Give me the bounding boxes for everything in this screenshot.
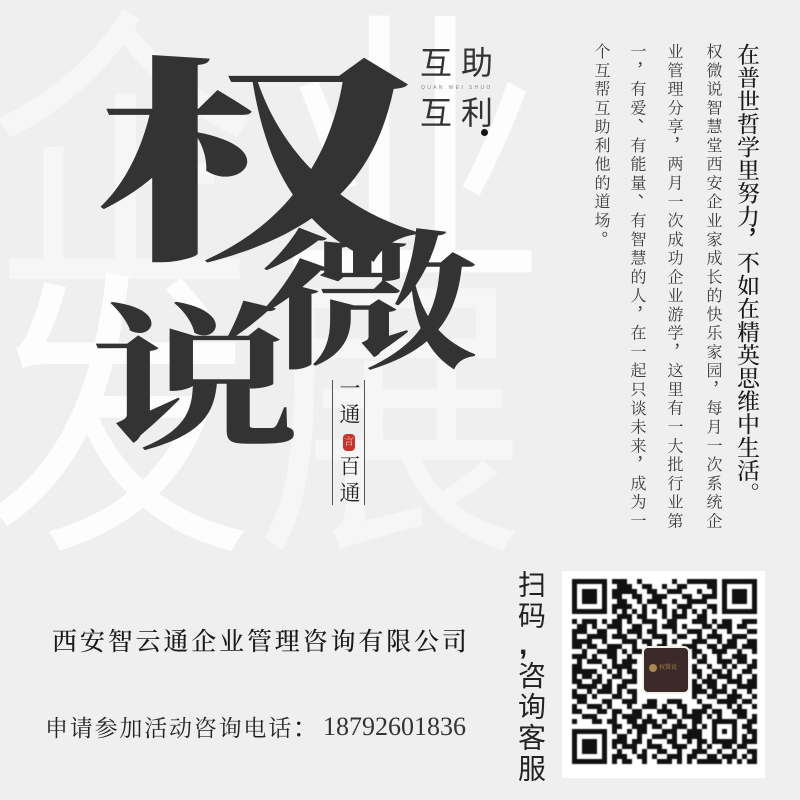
scan: 咨询客服: 咨询客服 [515, 661, 546, 785]
icon: red seal [343, 434, 355, 451]
QR code panel [562, 571, 765, 778]
slogan: 互助: 互助 [420, 45, 502, 81]
body text column 4: 个互帮互助利他的道场 。 [588, 43, 612, 249]
slogan: 互利: 互利 [420, 95, 502, 131]
phone number: 18792601836 [323, 712, 466, 741]
scan prompt [515, 570, 546, 785]
vertical motto with rules and seal [332, 380, 365, 505]
headline column: 在普世哲学里努力 ， 不如在精英思维中生活。 [730, 43, 763, 505]
icon: red seal: 言 [344, 437, 354, 448]
QR centre logo [642, 646, 690, 694]
body text column 2: 业管理分享 ， 两月一次成功企业游学 ， 这里有一大批行业第 [661, 43, 685, 531]
motto: 一通: 一通 [337, 377, 361, 429]
motto: 百通: 百通 [337, 455, 361, 508]
contact phone [45, 709, 466, 743]
scan: 扫码: 扫码 [515, 570, 546, 632]
calligraphy title: 微: 微 [258, 222, 480, 389]
calligraphy title: 权: 权 [95, 48, 420, 289]
pinyin caption: QUAN WEI SHUO [421, 85, 493, 91]
scan comma: , [519, 628, 527, 661]
logo name: 权微说 [659, 665, 677, 671]
background watermark: 展: 展 [256, 254, 526, 590]
icon: black dot [481, 129, 488, 136]
contact phone: 申请参加活动咨询电话： [45, 709, 318, 743]
body text column 1: 权微说智慧堂西安企业家成长的快乐家园 ， 每月一次系统企 [700, 43, 724, 531]
background watermark: 业: 业 [277, 0, 547, 328]
QR code [571, 578, 758, 765]
body text column 3: 一 ， 有爱 、 有能量 、 有智慧的人 ， 在一起只谈未来 ， 成为一 [624, 43, 648, 531]
logo emblem [649, 664, 657, 672]
company name: 西安智云通企业管理咨询有限公司 [52, 629, 470, 656]
calligraphy title: 说: 说 [88, 294, 300, 470]
